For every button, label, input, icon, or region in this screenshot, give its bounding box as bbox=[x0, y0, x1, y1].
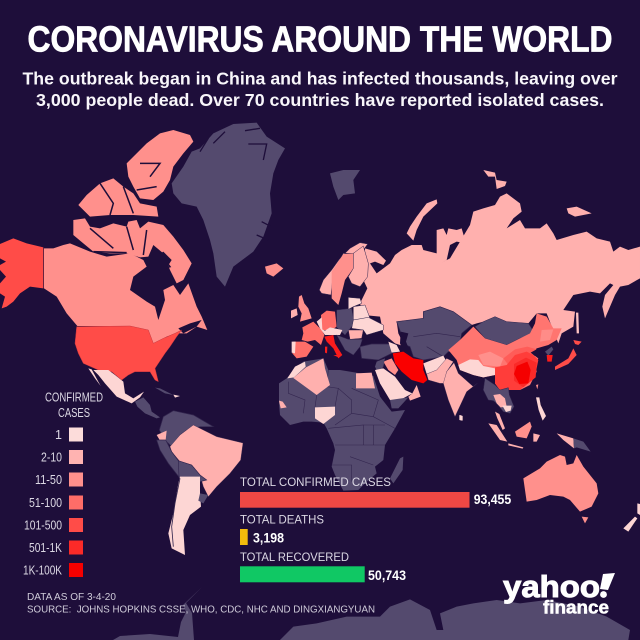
Hokkaido bbox=[573, 340, 582, 345]
legend row 51-100 bbox=[29, 496, 83, 510]
Iran bbox=[393, 352, 427, 383]
Sri Lanka bbox=[460, 415, 463, 421]
Ellesmere Island bbox=[127, 130, 193, 200]
Borneo bbox=[515, 422, 532, 438]
Greenland fjords bbox=[200, 128, 271, 240]
Italy bbox=[324, 335, 342, 358]
value: 50,743 bbox=[368, 567, 406, 583]
Argentina and Chile bbox=[168, 477, 201, 555]
Ukraine bbox=[352, 317, 383, 335]
Arctic channels bbox=[90, 163, 170, 270]
Pakistan bbox=[427, 358, 453, 383]
exclamation mark bbox=[600, 573, 615, 598]
subtitle line 1: The outbreak began in China and has infected thousands, leaving over bbox=[22, 68, 618, 88]
Severnaya Zemlya bbox=[483, 170, 507, 189]
Bolivia and Paraguay bbox=[178, 461, 207, 482]
Oman and UAE bbox=[408, 385, 421, 401]
Dominican Republic bbox=[173, 395, 180, 398]
source note: SOURCE: JOHNS HOPKINS CSSE, WHO, CDC, NHC AND DINGXIANGYUAN bbox=[27, 605, 375, 616]
data note: DATA AS OF 3-4-20 bbox=[27, 592, 116, 603]
legend row 1: 1 bbox=[55, 428, 62, 442]
stat: total deaths bbox=[240, 512, 324, 546]
China northeast provinces bbox=[540, 329, 553, 342]
Saudi Arabia bbox=[375, 368, 412, 400]
New Zealand north bbox=[637, 503, 640, 515]
legend row 1 bbox=[55, 428, 83, 442]
central China provinces bbox=[495, 352, 538, 390]
Romania bbox=[348, 330, 363, 339]
Central America bbox=[135, 397, 160, 418]
northern South America bbox=[159, 411, 213, 447]
Svalbard bbox=[330, 170, 360, 200]
Kazakhstan and Central Asia bbox=[397, 307, 472, 360]
Yahoo Finance logo bbox=[503, 569, 615, 618]
Indochina bbox=[483, 378, 514, 413]
Hudson islands bbox=[150, 252, 172, 273]
label: TOTAL DEATHS bbox=[240, 512, 324, 526]
Syria and Jordan bbox=[375, 358, 385, 374]
eastern China provinces bbox=[514, 358, 537, 387]
Sri Lanka dot bbox=[459, 415, 462, 421]
Japan bbox=[555, 348, 577, 370]
East and Southeast Asia bbox=[448, 313, 582, 430]
Morocco bbox=[287, 362, 306, 378]
Bohai Sea bbox=[531, 348, 540, 356]
Mongolia bbox=[475, 317, 535, 345]
Norway bbox=[319, 243, 368, 295]
Antarctic Peninsula bbox=[113, 587, 202, 640]
north China provinces bbox=[503, 347, 537, 365]
Ecuador bbox=[157, 431, 167, 441]
Balkans bbox=[337, 335, 362, 355]
legend row 101-500: 101-500 bbox=[24, 518, 62, 532]
Europe bbox=[291, 243, 383, 358]
bar bbox=[240, 492, 470, 508]
Peru bbox=[157, 440, 180, 478]
Iceland bbox=[265, 263, 283, 277]
Brazil bbox=[170, 425, 243, 497]
North America and Greenland bbox=[0, 123, 285, 345]
Sulawesi bbox=[533, 433, 540, 442]
Arctic Canada: Baffin and Victoria bbox=[73, 218, 192, 283]
Poland and Czechia bbox=[337, 308, 354, 335]
Tibet bbox=[458, 359, 495, 377]
Baja California bbox=[88, 368, 101, 386]
legend row 51-100: 51-100 bbox=[29, 496, 62, 510]
USA bbox=[75, 326, 182, 382]
Finland bbox=[348, 246, 368, 287]
legend row 501-1K: 501-1K bbox=[29, 541, 63, 555]
Yemen bbox=[390, 397, 408, 408]
label: TOTAL RECOVERED bbox=[240, 550, 349, 564]
Chile border bbox=[172, 478, 180, 547]
Afghanistan bbox=[423, 356, 446, 374]
Ireland bbox=[291, 308, 298, 318]
legend subtitle: CASES bbox=[58, 406, 90, 420]
legend row 11-50 bbox=[35, 472, 83, 487]
Russia bbox=[360, 193, 640, 347]
Cuba bbox=[155, 388, 173, 395]
subtitle bbox=[22, 68, 618, 110]
Senegal bbox=[279, 401, 287, 408]
Arctic Canada: central islands bbox=[78, 178, 158, 217]
legend row 2-10 bbox=[41, 450, 83, 464]
Caucasus bbox=[388, 342, 400, 353]
Algeria bbox=[293, 358, 330, 395]
Germany bbox=[321, 311, 337, 330]
Canada mainland bbox=[44, 243, 207, 345]
bar bbox=[240, 529, 248, 545]
Sweden bbox=[332, 253, 353, 305]
New Guinea west bbox=[557, 433, 574, 448]
New Siberian Islands bbox=[567, 207, 592, 217]
Madagascar bbox=[390, 457, 403, 483]
finance wordmark: finance bbox=[543, 598, 609, 618]
Qinghai bbox=[478, 352, 503, 367]
legend row 11-50: 11-50 bbox=[35, 473, 62, 487]
Gulf of St Lawrence bbox=[178, 320, 202, 333]
Taiwan bbox=[536, 384, 538, 389]
Turkey bbox=[360, 344, 392, 360]
yahoo wordmark: yahoo bbox=[503, 569, 600, 604]
Portugal bbox=[292, 342, 296, 353]
Greenland bbox=[172, 123, 285, 287]
Africa landmass bbox=[279, 358, 405, 491]
New Guinea east bbox=[573, 438, 591, 452]
Uruguay bbox=[198, 493, 208, 503]
Sakhalin bbox=[576, 313, 579, 333]
Novaya Zemlya bbox=[407, 199, 437, 241]
legend title: CONFIRMED bbox=[45, 390, 103, 404]
USA, Mexico, Central America bbox=[75, 326, 182, 418]
Benelux and Switzerland bbox=[317, 317, 342, 335]
India bbox=[443, 363, 477, 417]
value: 3,198 bbox=[253, 530, 284, 546]
African borders bbox=[288, 370, 395, 482]
Alaska bbox=[0, 238, 43, 308]
Nigeria bbox=[315, 407, 335, 424]
Russia and northern Asia bbox=[330, 170, 640, 421]
Malay peninsula bbox=[495, 412, 505, 430]
Antarctica bbox=[280, 599, 630, 640]
legend row 2-10: 2-10 bbox=[41, 450, 62, 464]
New Zealand bbox=[623, 517, 637, 532]
Tasmania bbox=[582, 517, 588, 523]
Hubei region bbox=[514, 362, 531, 384]
Indonesia and Oceania bbox=[280, 422, 640, 640]
stat: total recovered bbox=[240, 550, 406, 583]
legend row 1K-100K: 1K-100K bbox=[23, 564, 63, 578]
label: TOTAL CONFIRMED CASES bbox=[240, 475, 391, 489]
Sicily bbox=[333, 355, 340, 357]
Cambodia bbox=[502, 406, 512, 412]
China base bbox=[448, 313, 562, 390]
Egypt bbox=[356, 373, 375, 388]
stat: total confirmed cases bbox=[240, 475, 511, 508]
United Kingdom bbox=[298, 295, 312, 322]
bar bbox=[240, 566, 365, 582]
Sumatra bbox=[488, 423, 507, 442]
Baltics bbox=[348, 297, 362, 309]
Iraq bbox=[383, 358, 398, 375]
North Korea bbox=[545, 347, 553, 356]
France bbox=[302, 322, 324, 345]
Belarus bbox=[353, 305, 370, 320]
legend: confirmed cases bbox=[23, 390, 103, 578]
Sardinia bbox=[325, 347, 327, 353]
subtitle line 2: 3,000 people dead. Over 70 countries have reported isolated cases. bbox=[36, 90, 604, 110]
Java bbox=[508, 443, 523, 449]
value: 93,455 bbox=[474, 491, 511, 507]
Australia bbox=[523, 455, 598, 512]
Philippines bbox=[536, 397, 546, 421]
Mexico bbox=[93, 370, 144, 403]
Central Asia borders bbox=[413, 333, 460, 357]
South Korea bbox=[547, 355, 553, 362]
Thailand bbox=[493, 394, 507, 407]
Spain bbox=[292, 342, 313, 358]
South America bbox=[157, 411, 243, 555]
Caspian Sea bbox=[400, 332, 411, 353]
Africa bbox=[279, 358, 405, 491]
